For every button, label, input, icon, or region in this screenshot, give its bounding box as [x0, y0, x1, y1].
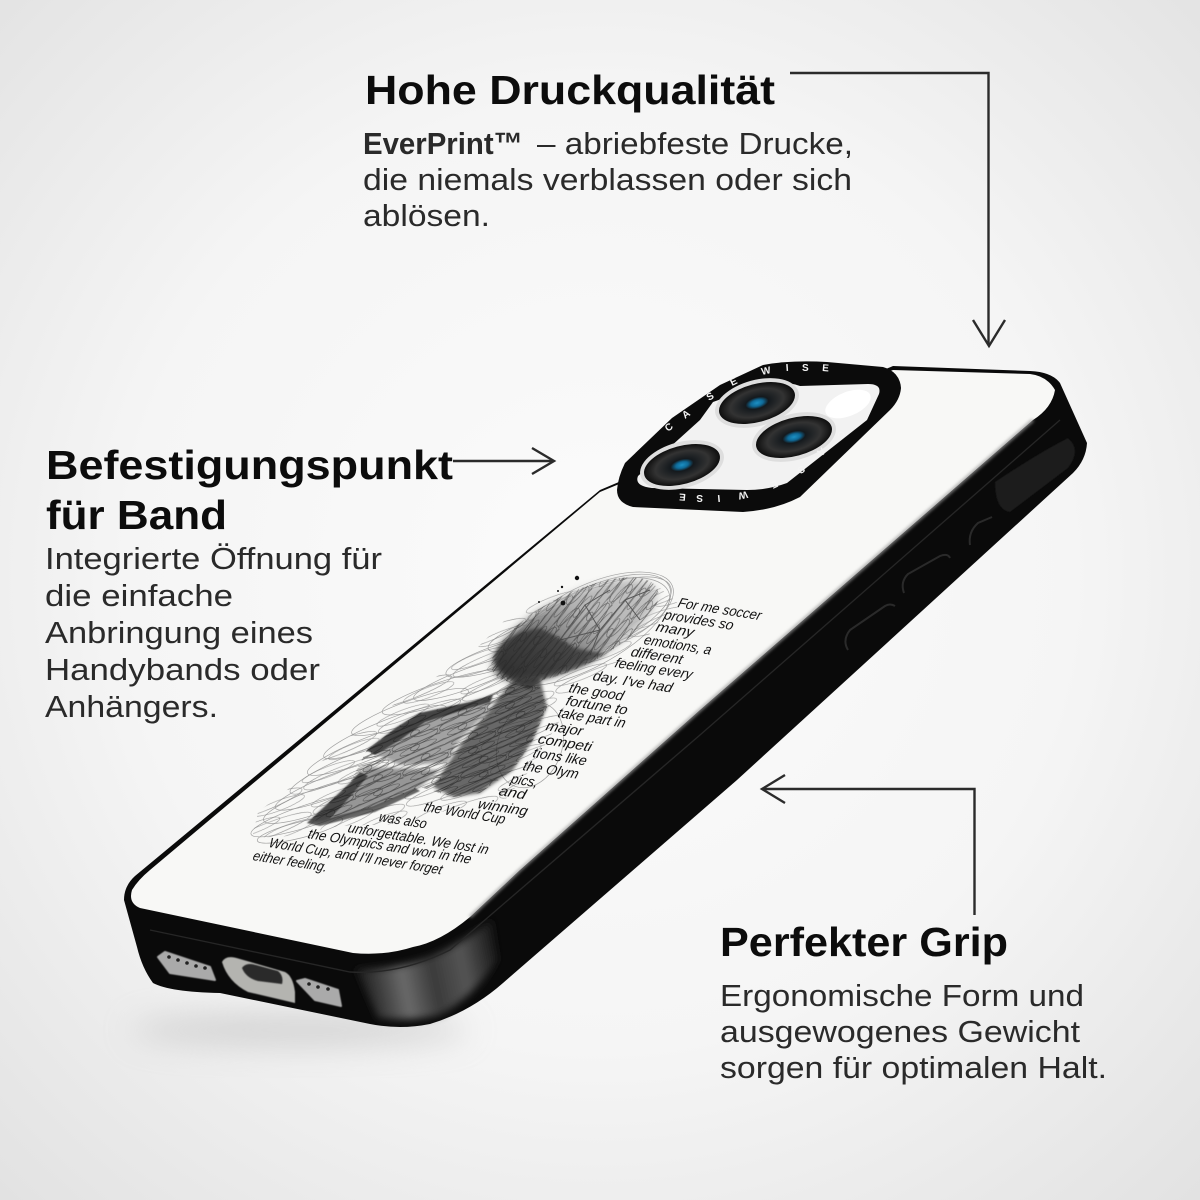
artwork caption text: tions like	[531, 745, 589, 768]
arrow: strap attachment	[453, 448, 554, 474]
trophy base dark	[493, 628, 607, 690]
body text: Ergonomische Form und	[720, 978, 1084, 1013]
heading: Hohe Druckqualität	[365, 67, 775, 113]
volume up button	[903, 555, 950, 593]
artwork caption text: pics,	[508, 770, 540, 790]
side ridge	[150, 420, 1060, 972]
camera glass	[637, 383, 880, 490]
body text: Handybands oder	[45, 652, 320, 687]
heading	[46, 442, 453, 538]
dark outline of forearm	[307, 772, 420, 826]
body text: die einfache	[45, 578, 233, 613]
callout: Perfekter Grip	[720, 919, 1107, 1085]
faint scribble field	[252, 582, 680, 838]
artwork caption text: winning	[476, 796, 530, 819]
switch button	[970, 517, 992, 545]
body text: die niemals verblassen oder sich	[363, 162, 852, 197]
forearm tone	[307, 767, 440, 823]
volume down button	[845, 604, 895, 650]
body text: ausgewogenes Gewicht	[720, 1014, 1080, 1049]
artwork caption text: World Cup, and I'll never forget	[267, 835, 446, 877]
heading: Befestigungspunkt	[46, 442, 453, 488]
phone shadow	[130, 1014, 470, 1046]
back face	[131, 370, 1055, 954]
lens left	[635, 432, 729, 498]
artwork caption text: the Olym	[521, 758, 581, 782]
artwork caption text: the World Cup	[422, 799, 508, 827]
heading: für Band	[46, 492, 227, 538]
case corner highlight	[355, 918, 498, 1019]
artwork caption text: either feeling.	[251, 848, 330, 875]
bottom left speaker	[158, 952, 215, 980]
faint scribble loops	[248, 552, 687, 848]
body text: – abriebfeste Drucke,	[537, 126, 853, 161]
portrait scribble overlay	[307, 683, 547, 823]
artwork caption text: different	[629, 644, 686, 667]
bottom right speaker	[297, 979, 341, 1006]
scribble portrait artwork	[248, 552, 765, 877]
heading: Perfekter Grip	[720, 919, 1008, 965]
arrow: grip	[762, 775, 974, 915]
artwork caption text: competi	[536, 731, 595, 754]
lens top	[710, 370, 804, 436]
artwork caption text: the Olympics and won in the	[306, 826, 474, 867]
speaker holes left	[167, 955, 207, 970]
speaker holes right	[307, 982, 330, 991]
ring branding bottom: CASEWISE	[678, 428, 847, 503]
artwork caption text: unforgettable. We lost in	[346, 820, 491, 857]
trophy cup scribbles	[477, 556, 673, 704]
charging port	[222, 957, 295, 1003]
arrow: print quality	[790, 73, 1005, 346]
body text: Anhängers.	[45, 689, 218, 724]
artwork caption text: take part in	[556, 705, 628, 731]
case body	[124, 366, 1087, 1027]
body text	[45, 541, 382, 724]
face edge shading	[470, 420, 1033, 917]
body text: Integrierte Öffnung für	[45, 541, 382, 576]
artwork caption text: many	[654, 619, 697, 640]
artwork caption text: the good	[567, 680, 627, 704]
callout: Hohe Druckqualität	[363, 67, 853, 233]
body text	[363, 126, 853, 233]
artwork caption text: feeling every	[613, 655, 696, 682]
flash	[821, 384, 875, 424]
artwork caption text: For me soccer	[676, 595, 765, 623]
body text: EverPrint™	[363, 126, 523, 161]
artwork caption text: emotions, a	[642, 632, 714, 658]
camera module	[617, 361, 901, 512]
lens right	[747, 404, 841, 470]
ring branding top: CASEWISE	[663, 363, 830, 434]
side window	[995, 438, 1075, 512]
artwork caption text	[251, 595, 765, 877]
trophy net lines	[560, 590, 650, 655]
callout: Befestigungspunkt für Band	[45, 442, 453, 724]
artwork caption text: major	[544, 718, 587, 739]
camera ring	[617, 361, 901, 512]
dark arm tone	[433, 678, 547, 797]
artwork caption text: provides so	[661, 606, 736, 633]
body text: ablösen.	[363, 198, 490, 233]
trophy cup	[479, 559, 671, 701]
artwork caption text: fortune to	[564, 693, 630, 718]
artwork caption text: day. I've had	[591, 668, 676, 696]
dark outline of head	[367, 695, 493, 755]
body text: sorgen für optimalen Halt.	[720, 1050, 1107, 1085]
body text	[720, 978, 1107, 1085]
phone case	[124, 366, 1087, 1027]
ink specks	[538, 576, 579, 605]
light body tone	[367, 695, 493, 765]
artwork caption text: was also	[377, 809, 429, 831]
port opening	[242, 964, 282, 984]
body text: Anbringung eines	[45, 615, 313, 650]
artwork caption text: and	[497, 783, 530, 802]
